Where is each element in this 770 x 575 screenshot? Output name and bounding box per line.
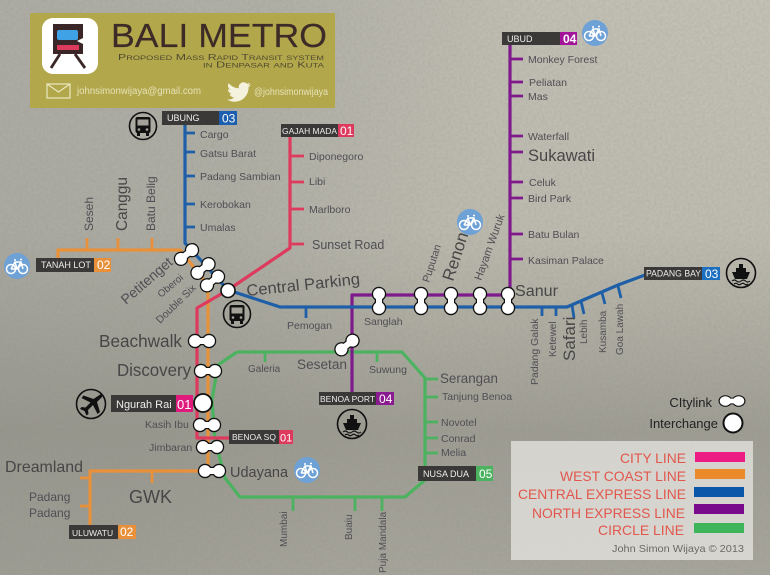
station labels: Hayam Wuruk bbox=[473, 212, 508, 282]
terminus: Uluwatu: ULUWATU bbox=[72, 528, 113, 538]
station labels: Gatsu Barat bbox=[200, 148, 256, 160]
station labels: Renon bbox=[439, 230, 472, 283]
legend: city line: CITY LINE bbox=[620, 450, 686, 466]
twitter handle: @johnsimonwijaya bbox=[254, 87, 328, 98]
station labels: Double Six bbox=[154, 282, 199, 326]
station labels: Sunset Road bbox=[312, 238, 384, 252]
title: BALI METRO bbox=[111, 17, 327, 54]
terminus: Tanah Lot: TANAH LOT bbox=[41, 260, 91, 270]
station labels: Batu Bulan bbox=[528, 229, 580, 241]
station labels: Mas bbox=[528, 91, 548, 103]
station labels: Melia bbox=[441, 447, 466, 459]
legend: circle line bbox=[598, 522, 744, 538]
icon: bike Udayana bbox=[294, 457, 320, 483]
legend: west coast line: WEST COAST LINE bbox=[560, 468, 686, 484]
terminus: Ubung: 03 bbox=[222, 112, 236, 126]
station labels: Umalas bbox=[200, 222, 236, 234]
station ticks bbox=[80, 59, 621, 511]
credit: John Simon Wijaya © 2013 bbox=[612, 543, 744, 555]
station labels: Udayana bbox=[230, 464, 289, 481]
station labels: Peliatan bbox=[529, 77, 567, 89]
station labels: Padang bbox=[29, 490, 70, 504]
key: citylink: CItylink bbox=[669, 395, 712, 410]
station labels: Monkey Forest bbox=[528, 54, 598, 66]
terminus: Ubung bbox=[162, 111, 237, 126]
station labels: Cargo bbox=[200, 129, 229, 141]
station labels: Waterfall bbox=[528, 131, 569, 143]
icon: metro train app icon bbox=[42, 18, 98, 74]
station labels: Central Parking bbox=[246, 271, 361, 300]
legend: city line bbox=[620, 450, 745, 466]
terminus: Benoa Port: BENOA PORT bbox=[320, 394, 375, 404]
station labels: Padang Galak bbox=[529, 318, 541, 385]
legend: central express line: CENTRAL EXPRESS LINE bbox=[518, 486, 686, 502]
line: west coast bbox=[58, 250, 208, 527]
station labels: Ketewel bbox=[548, 321, 559, 357]
icon: airplane bbox=[76, 390, 106, 418]
terminus: Ubud: 04 bbox=[563, 32, 577, 46]
station labels: Novotel bbox=[441, 417, 477, 429]
station labels: Lebih bbox=[579, 320, 590, 344]
icon: bike Tanah Lot bbox=[4, 253, 30, 279]
terminus: Ubung: UBUNG bbox=[167, 113, 200, 123]
station labels: Puja Mandala bbox=[378, 511, 389, 573]
terminus: Gajah Mada: GAJAH MADA bbox=[282, 126, 337, 136]
line: north express bbox=[352, 45, 510, 392]
panel: header bbox=[30, 13, 335, 108]
legend: north express line bbox=[532, 504, 744, 521]
key: citylink bbox=[669, 395, 745, 410]
legend: circle line: CIRCLE LINE bbox=[598, 522, 684, 538]
station labels: Padang Sambian bbox=[200, 171, 281, 183]
line: central express bbox=[185, 125, 645, 307]
key: interchange: Interchange bbox=[649, 416, 718, 431]
panel: line legend bbox=[511, 441, 753, 560]
station labels: Tanjung Benoa bbox=[442, 391, 512, 403]
terminus: Benoa Sq: BENOA SQ bbox=[232, 432, 276, 442]
station labels: Kusamba bbox=[598, 310, 609, 353]
station labels: Kasih Ibu bbox=[145, 419, 189, 431]
station labels: Kerobokan bbox=[200, 199, 251, 211]
terminus: Tanah Lot bbox=[36, 258, 111, 272]
station labels: Goa Lawah bbox=[615, 304, 626, 355]
station labels: Dreamland bbox=[5, 459, 83, 476]
station labels: Conrad bbox=[441, 433, 476, 445]
terminus: Benoa Port: 04 bbox=[379, 392, 393, 406]
station labels: Jimbaran bbox=[149, 442, 192, 454]
station labels: Beachwalk bbox=[99, 331, 182, 351]
station labels: Serangan bbox=[440, 370, 498, 386]
station labels bbox=[5, 54, 626, 573]
terminus: Ngurah Rai: 01 bbox=[177, 397, 191, 412]
line: city bbox=[197, 137, 290, 438]
station labels: Seseh bbox=[82, 197, 96, 231]
station labels: GWK bbox=[129, 487, 172, 507]
terminus: Gajah Mada: 01 bbox=[340, 124, 354, 138]
station labels: Puputan bbox=[420, 243, 444, 284]
legend: west coast line bbox=[560, 468, 745, 484]
station labels: Canggu bbox=[114, 177, 131, 231]
icon: bus Central Parking bbox=[224, 300, 250, 328]
terminus: Gajah Mada bbox=[281, 124, 354, 138]
terminus: Nusa Dua: 05 bbox=[479, 467, 493, 481]
terminus: Padang Bay bbox=[644, 267, 720, 281]
station labels: Pemogan bbox=[287, 320, 332, 332]
icon: envelope bbox=[47, 84, 70, 98]
terminus: Ubud: UBUD bbox=[507, 34, 533, 44]
icon: twitter bird bbox=[227, 82, 251, 102]
icon: ship Benoa Port bbox=[338, 410, 366, 438]
terminus: Tanah Lot: 02 bbox=[97, 258, 111, 272]
station labels: Suwung bbox=[369, 364, 407, 376]
terminus: Benoa Port bbox=[319, 392, 394, 406]
station labels: Sanglah bbox=[364, 316, 403, 328]
station labels: Oberoi bbox=[156, 273, 186, 300]
terminus: Nusa Dua: NUSA DUA bbox=[423, 469, 469, 479]
station labels: Padang bbox=[29, 506, 70, 520]
legend: north express line: NORTH EXPRESS LINE bbox=[532, 505, 685, 521]
station labels: Batu Belig bbox=[144, 176, 158, 231]
station labels: Mumbai bbox=[279, 511, 290, 547]
terminus: Ubud bbox=[502, 32, 577, 46]
icon: bus Ubung bbox=[130, 112, 156, 140]
station labels: Bird Park bbox=[528, 193, 572, 205]
terminus: Padang Bay: PADANG BAY bbox=[646, 268, 701, 278]
subtitle: Proposed Mass Rapid Transit system bbox=[118, 53, 324, 62]
terminus: Benoa Sq: 01 bbox=[280, 432, 292, 444]
terminus: Padang Bay: 03 bbox=[705, 267, 719, 281]
station labels: Buaiu bbox=[344, 514, 355, 540]
station labels: Petitenget bbox=[117, 254, 176, 307]
terminus: Ngurah Rai bbox=[111, 395, 193, 412]
key: interchange bbox=[649, 414, 742, 432]
station labels: Sesetan bbox=[297, 357, 347, 372]
station labels: Galeria bbox=[248, 364, 281, 375]
line: circle bbox=[212, 352, 425, 497]
station labels: Discovery bbox=[117, 360, 191, 380]
station labels: Kasiman Palace bbox=[528, 255, 604, 267]
interchange: Central Parking bbox=[221, 284, 235, 298]
icon: bike Renon bbox=[457, 209, 483, 235]
terminus: Uluwatu bbox=[69, 525, 136, 539]
terminus: Nusa Dua bbox=[418, 466, 493, 481]
station labels: Celuk bbox=[529, 177, 557, 189]
interchange: Ngurah Rai bbox=[194, 394, 212, 412]
terminus: Uluwatu: 02 bbox=[120, 525, 134, 539]
terminus: Benoa Sq bbox=[229, 430, 293, 444]
station labels: Safari bbox=[560, 317, 579, 361]
station labels: Marlboro bbox=[309, 204, 351, 216]
subtitle bbox=[118, 53, 324, 70]
citylink markers bbox=[171, 240, 515, 478]
station labels: Libi bbox=[309, 176, 325, 188]
icon: bike Ubud bbox=[582, 20, 608, 46]
icon: ship Padang Bay bbox=[726, 258, 756, 288]
subtitle: in Denpasar and Kuta bbox=[203, 60, 324, 70]
email: johnsimonwijaya@gmail.com bbox=[76, 86, 201, 97]
station labels: Diponegoro bbox=[309, 151, 363, 163]
terminus: Ngurah Rai: Ngurah Rai bbox=[116, 399, 172, 411]
station labels: Sukawati bbox=[528, 146, 595, 165]
station labels: Sanur bbox=[515, 283, 559, 300]
